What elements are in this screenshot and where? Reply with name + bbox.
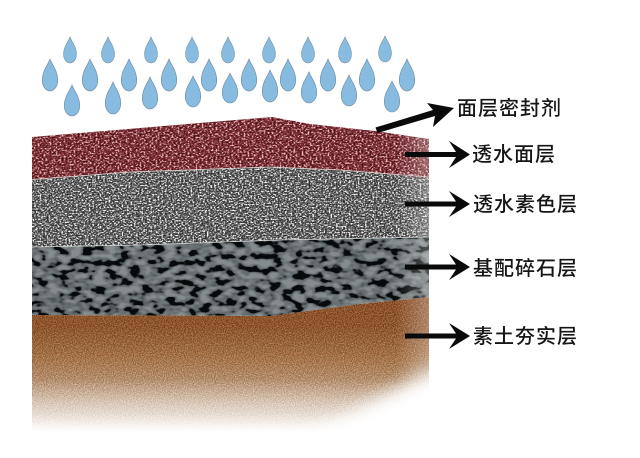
side shading <box>395 135 429 435</box>
icon: rain drops <box>42 36 415 116</box>
layer seam: surface and grey <box>32 167 429 180</box>
layer: red permeable surface <box>32 115 429 183</box>
label: permeable colour layer: 透水素色层 <box>473 193 578 216</box>
layer seam: grey and aggregate <box>32 237 429 247</box>
arrow: permeable colour layer <box>405 191 470 217</box>
arrow: graded aggregate <box>405 254 470 280</box>
layer: grey permeable <box>32 165 429 250</box>
layer: aggregate <box>32 235 429 320</box>
layer: soil <box>32 297 429 429</box>
label: compacted soil: 素土夯实层 <box>473 325 578 348</box>
label: sealant: 面层密封剂 <box>457 97 562 120</box>
label: permeable surface: 透水面层 <box>472 143 556 166</box>
arrow: permeable surface <box>405 141 470 168</box>
arrow: sealant <box>376 103 454 133</box>
label: graded aggregate: 基配碎石层 <box>473 257 578 280</box>
arrow: compacted soil <box>405 323 470 349</box>
